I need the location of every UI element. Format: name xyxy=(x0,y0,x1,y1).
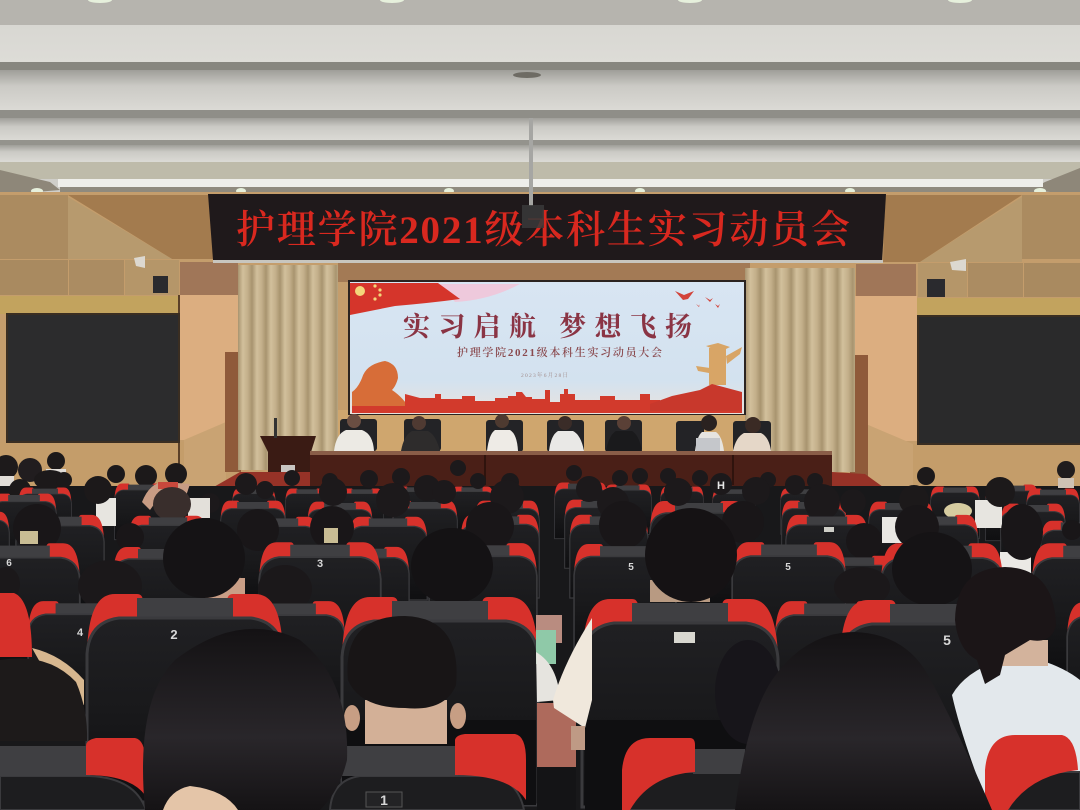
ceiling xyxy=(0,0,1080,195)
person 6 xyxy=(695,415,724,451)
student with braid xyxy=(952,567,1080,810)
right wall camera xyxy=(927,259,966,297)
person 4 xyxy=(549,416,584,451)
student with short hair xyxy=(344,616,466,744)
seat number five centre: 5 xyxy=(628,562,634,573)
head table xyxy=(310,451,832,487)
student with long hair right xyxy=(735,632,992,810)
seating base xyxy=(0,486,1080,810)
row four heads xyxy=(13,501,1080,559)
head small right xyxy=(834,567,890,607)
front row seat left xyxy=(0,738,146,810)
student lower left xyxy=(0,648,87,741)
hand xyxy=(163,786,238,810)
student white shirt right xyxy=(882,485,936,543)
person 1 xyxy=(334,414,374,451)
seat number five: 5 xyxy=(943,632,951,648)
front row seat centre xyxy=(330,734,526,810)
students right far xyxy=(944,477,1015,528)
stage chairs xyxy=(340,419,771,452)
row five seats xyxy=(0,494,56,562)
far audience xyxy=(0,452,1080,608)
seat number six: 6 xyxy=(6,558,12,569)
hair clips xyxy=(20,528,338,544)
student behind seat xyxy=(715,640,781,744)
left upper panels xyxy=(0,195,241,492)
seat number one: 1 xyxy=(380,792,388,808)
front row seat right centre xyxy=(622,738,745,810)
head corner left xyxy=(0,567,20,601)
cap letter: H xyxy=(717,480,725,492)
seat number two: 2 xyxy=(170,627,178,642)
flag xyxy=(350,283,460,315)
student long hair right xyxy=(1000,504,1043,574)
left display screen xyxy=(7,314,179,442)
centre wall xyxy=(338,262,750,282)
red skyline band xyxy=(352,406,742,413)
screen title: 实习启航 梦想飞扬 xyxy=(403,311,692,342)
front row seat right xyxy=(985,735,1080,810)
right curtain xyxy=(745,268,855,472)
tiananmen gate xyxy=(650,384,742,411)
pink wash xyxy=(440,284,520,302)
student white sleeve xyxy=(553,618,592,728)
flag stars xyxy=(355,284,382,301)
person 2 xyxy=(401,416,440,451)
person 7 xyxy=(733,417,771,451)
skyline xyxy=(405,389,660,412)
right display screen xyxy=(918,316,1080,444)
projection screen xyxy=(348,280,746,415)
seat number three: 3 xyxy=(317,558,323,570)
stone lion xyxy=(352,361,412,412)
row six heads xyxy=(235,460,823,501)
seat number five right: 5 xyxy=(785,562,791,573)
left curtain xyxy=(238,265,338,470)
people on stage xyxy=(334,414,771,452)
laptop xyxy=(696,438,720,452)
side floor xyxy=(205,472,890,492)
person 3 xyxy=(487,414,518,451)
ceiling lamps xyxy=(31,0,1046,194)
left wall camera xyxy=(134,256,168,293)
student arm skin xyxy=(571,726,585,750)
wood wall xyxy=(0,192,1080,494)
row two seats xyxy=(0,593,1080,810)
row four seats xyxy=(0,512,9,584)
head right centre xyxy=(645,508,737,602)
row five heads xyxy=(200,473,866,520)
screen date: 2023年6月28日 xyxy=(521,371,568,379)
student with long hair left xyxy=(143,629,347,810)
person 5 xyxy=(606,416,642,451)
screen subtitle: 护理学院2021级本科生实习动员大会 xyxy=(457,345,662,359)
right upper panels xyxy=(850,195,1080,494)
led banner xyxy=(208,194,886,263)
head small left xyxy=(78,560,142,612)
banner text: 护理学院2021级本科生实习动员会 xyxy=(236,209,850,252)
seat number four: 4 xyxy=(77,627,84,639)
hanging projector xyxy=(522,118,544,228)
seat number one xyxy=(366,792,402,808)
head far right xyxy=(892,532,972,606)
far audience right xyxy=(917,461,1075,488)
ceiling fixture ring xyxy=(513,72,541,78)
birds xyxy=(675,291,720,308)
head left xyxy=(163,518,245,598)
row three heads xyxy=(0,508,972,613)
student with raised hands xyxy=(142,482,210,521)
far audience left xyxy=(0,452,187,501)
row three seats xyxy=(0,542,1080,672)
plate on row four xyxy=(824,527,834,532)
podium xyxy=(260,418,316,482)
head small centre xyxy=(258,565,312,613)
seat number plate xyxy=(674,632,695,643)
head centre xyxy=(411,528,493,604)
huabiao column xyxy=(696,343,742,385)
row six seats xyxy=(18,488,72,544)
student in white shirt xyxy=(84,476,116,526)
aisle items xyxy=(536,615,576,810)
